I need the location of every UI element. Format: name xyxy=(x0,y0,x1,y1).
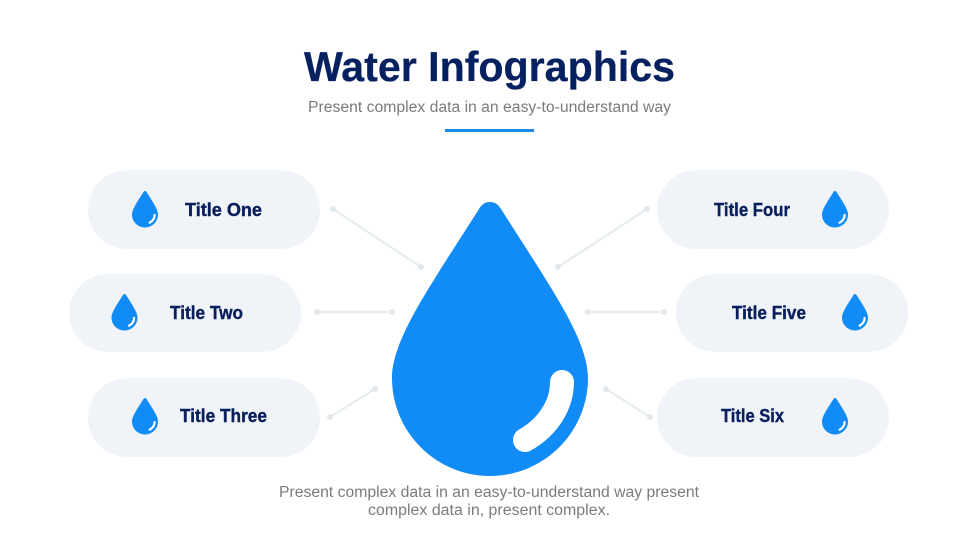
label: title six: Title Six xyxy=(721,405,785,426)
label: title five: Title Five xyxy=(732,302,806,323)
connector: title five xyxy=(585,309,667,315)
icon: water drop two xyxy=(112,294,138,330)
body text: Present complex data in an easy-to-understand way present xyxy=(279,484,700,501)
label: title one: Title One xyxy=(185,199,262,220)
connector: title three xyxy=(327,386,378,420)
label: title two: Title Two xyxy=(170,302,243,323)
icon: central water drop xyxy=(392,202,588,476)
panel: title six xyxy=(657,378,889,457)
icon: water drop four xyxy=(822,191,848,228)
label: title four: Title Four xyxy=(714,199,790,220)
icon: water drop one xyxy=(132,191,158,228)
connector: title two xyxy=(314,309,395,315)
panel: title five xyxy=(676,274,908,352)
body text: complex data in, present complex. xyxy=(368,502,610,519)
subtitle: Present complex data in an easy-to-understand way xyxy=(308,99,671,116)
icon: water drop six xyxy=(822,398,848,434)
connector: title six xyxy=(603,386,653,420)
connector: title four xyxy=(555,206,650,270)
panel: title three xyxy=(88,378,320,457)
label: title three: Title Three xyxy=(180,405,267,426)
connector: title one xyxy=(330,206,424,270)
icon: water drop three xyxy=(132,398,158,434)
panel: title one xyxy=(88,170,320,249)
body text xyxy=(279,484,700,519)
title underline xyxy=(445,129,534,132)
panel: title four xyxy=(657,170,889,249)
panel: title two xyxy=(69,274,301,352)
title: Water Infographics xyxy=(304,43,675,90)
icon: water drop five xyxy=(842,294,868,330)
